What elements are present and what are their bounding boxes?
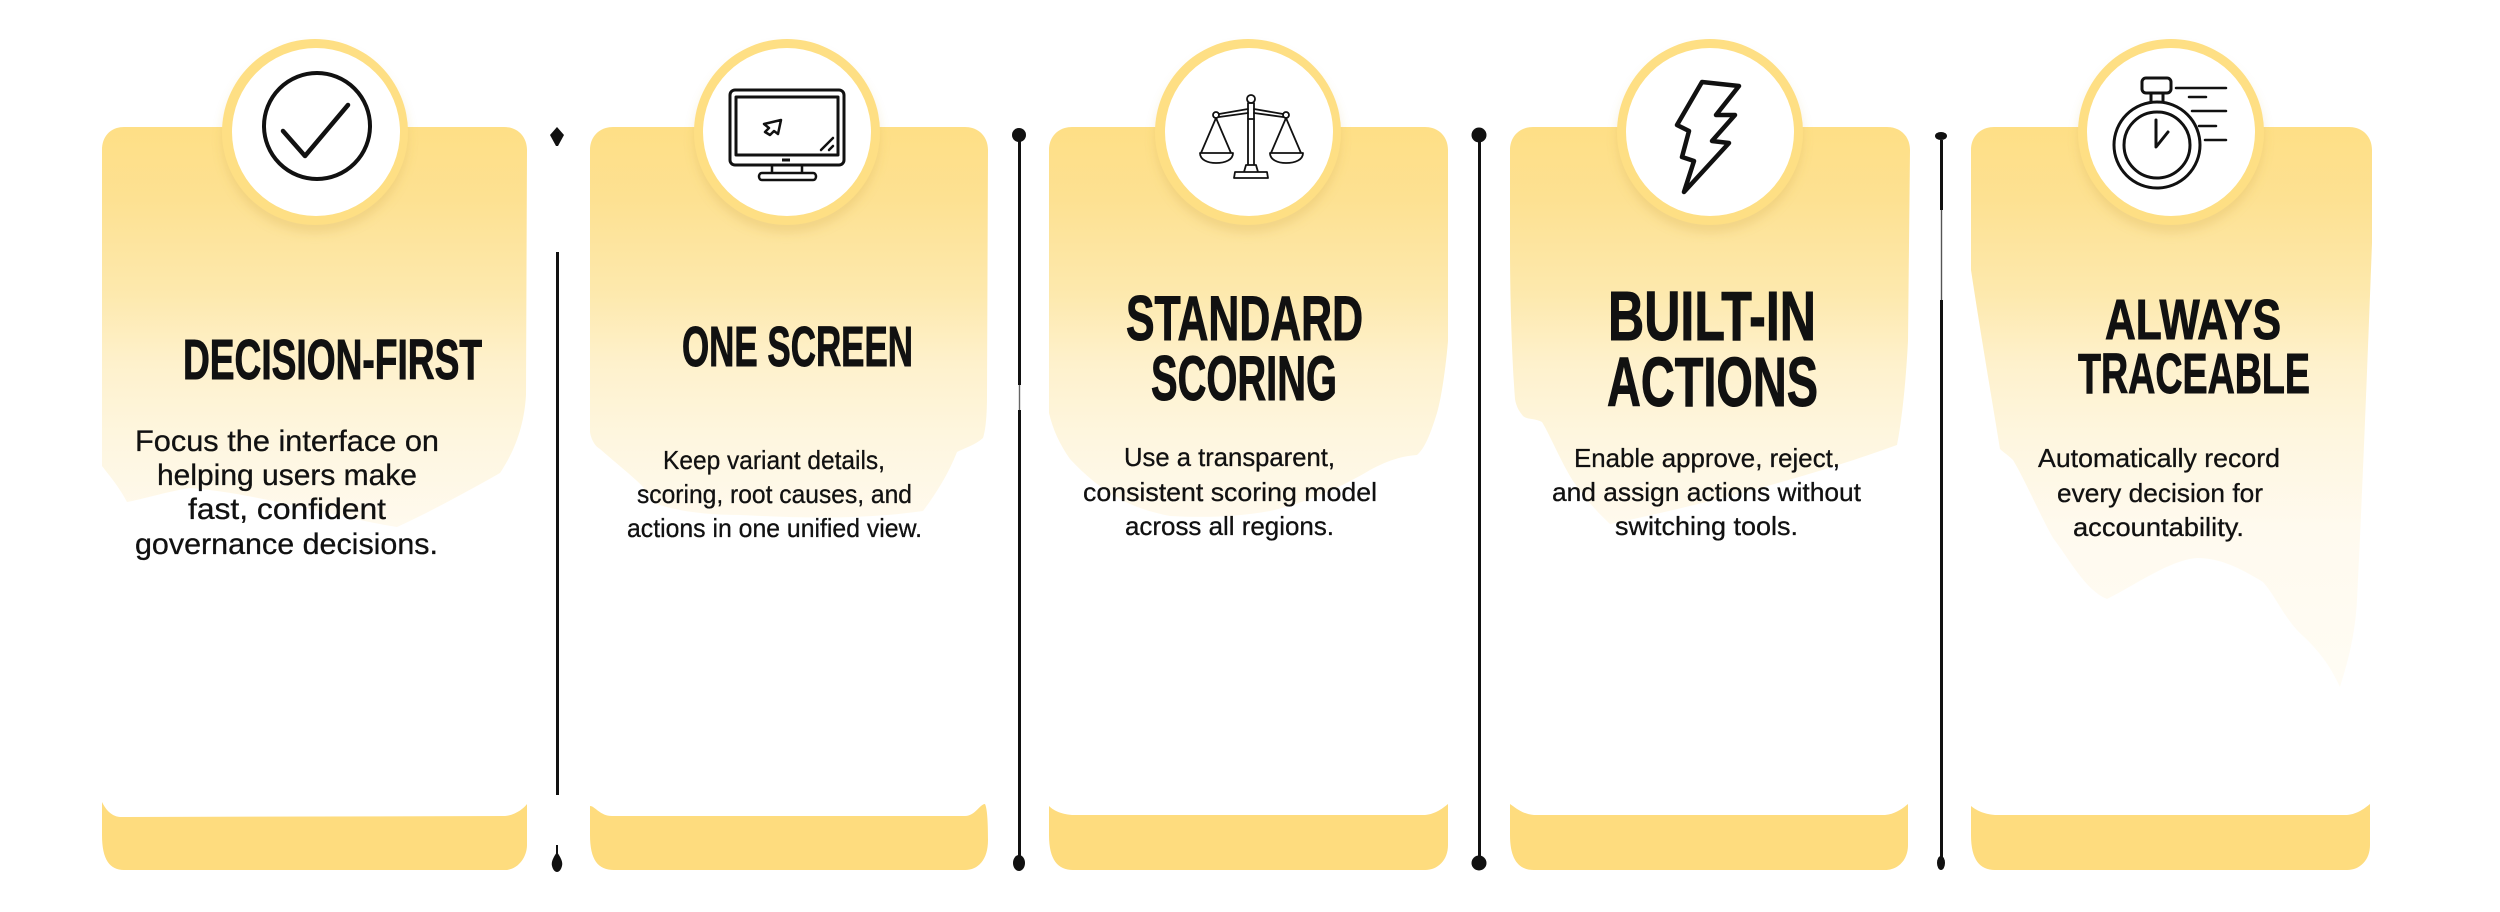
heading: ONE SCREEN <box>682 315 913 379</box>
icon badge: lightning bolt <box>1617 39 1803 225</box>
card background <box>1049 127 1448 517</box>
divider 3 <box>1472 128 1486 870</box>
body text: and assign actions without <box>1552 477 1862 507</box>
body text: accountability. <box>2073 512 2244 542</box>
body text: across all regions. <box>1125 511 1334 541</box>
icon badge: balance scale <box>1155 39 1341 225</box>
heading <box>1607 277 1818 421</box>
divider 2 <box>1012 128 1026 871</box>
card background <box>1510 127 1910 524</box>
body text <box>135 425 439 561</box>
body text: consistent scoring model <box>1083 477 1377 507</box>
body text: governance decisions. <box>135 528 438 561</box>
card footer band <box>1510 804 1908 870</box>
card background <box>590 127 988 518</box>
card background <box>1971 127 2372 687</box>
heading <box>2078 288 2310 406</box>
divider 4 <box>1935 132 1947 870</box>
body text: scoring, root causes, and <box>637 479 912 509</box>
body text: Use a transparent, <box>1124 442 1335 472</box>
panel: standard scoring <box>1049 39 1448 870</box>
body text: Focus the interface on <box>135 425 439 458</box>
heading: ALWAYS <box>2105 288 2281 352</box>
card footer band <box>102 802 527 870</box>
panel: one screen <box>590 39 988 870</box>
panel: built-in actions <box>1510 39 1910 870</box>
body text: fast, confident <box>188 493 387 526</box>
body text: Keep variant details, <box>663 445 885 475</box>
icon badge: monitor <box>694 39 880 225</box>
card background <box>102 127 527 527</box>
body text <box>1083 442 1377 541</box>
panel: always traceable <box>1971 39 2372 870</box>
body text <box>2038 443 2280 542</box>
icon badge: check mark <box>222 39 408 225</box>
card footer band <box>1049 804 1448 870</box>
body text: actions in one unified view. <box>627 513 922 543</box>
body text <box>627 445 922 543</box>
heading <box>1126 284 1363 414</box>
body text: helping users make <box>157 459 417 492</box>
body text: Enable approve, reject, <box>1574 443 1840 473</box>
heading: SCORING <box>1151 344 1337 414</box>
heading: ACTIONS <box>1607 343 1818 421</box>
icon badge: stopwatch <box>2078 39 2264 225</box>
card footer band <box>590 804 988 870</box>
panel: decision-first <box>102 39 527 870</box>
heading: STANDARD <box>1126 284 1363 354</box>
heading: DECISION-FIRST <box>183 328 482 392</box>
body text: Automatically record <box>2038 443 2280 473</box>
body text: switching tools. <box>1615 511 1798 541</box>
heading: BUILT-IN <box>1608 277 1816 355</box>
heading: TRACEABLE <box>2078 342 2310 406</box>
divider 1 <box>550 127 564 872</box>
card footer band <box>1971 804 2370 870</box>
body text <box>1552 443 1862 541</box>
body text: every decision for <box>2057 478 2263 508</box>
